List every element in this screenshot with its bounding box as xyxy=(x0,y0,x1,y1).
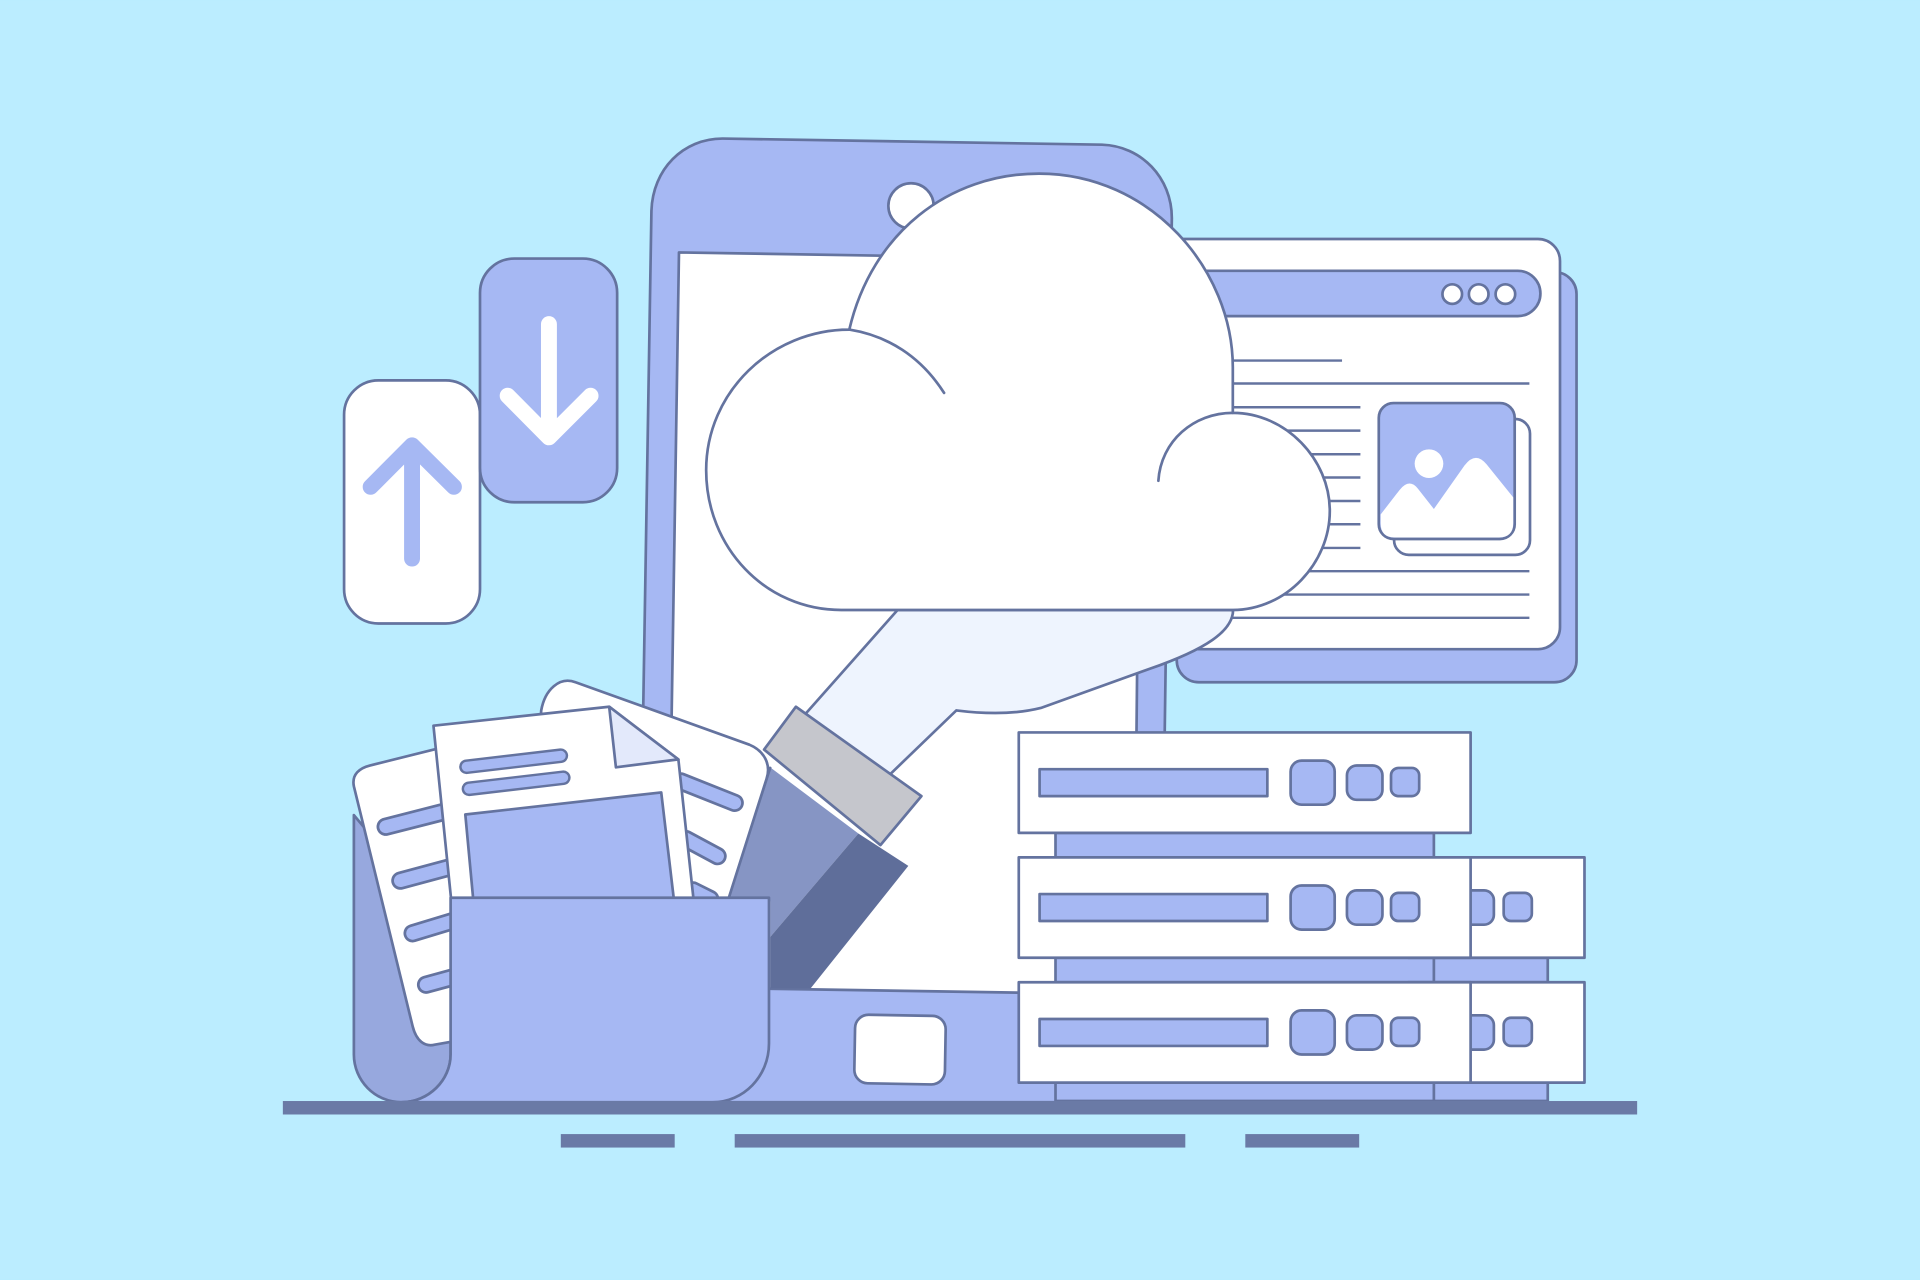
server back unit bottom xyxy=(1408,982,1584,1083)
ground dash left xyxy=(561,1134,675,1148)
document text lines xyxy=(467,756,563,789)
server unit middle xyxy=(1019,857,1471,958)
folder back xyxy=(354,815,451,1102)
ground line xyxy=(283,1101,1637,1114)
window header bar xyxy=(1176,271,1540,316)
document back right xyxy=(527,681,768,906)
document back left xyxy=(353,747,490,1045)
image mountains icon xyxy=(1381,458,1513,538)
document folded corner xyxy=(609,707,678,767)
browser window xyxy=(1151,239,1577,682)
server connector bands xyxy=(1056,833,1548,1101)
server unit bottom xyxy=(1019,982,1471,1083)
server back unit middle xyxy=(1408,857,1584,958)
image card back xyxy=(1394,419,1530,555)
window front panel xyxy=(1151,239,1560,649)
window back panel xyxy=(1177,272,1577,682)
flashlight body dark xyxy=(770,833,908,988)
tablet device xyxy=(637,139,1172,1102)
cloud inner curves xyxy=(849,330,1233,481)
flashlight head xyxy=(764,707,921,845)
light beam from flashlight to cloud xyxy=(802,610,1233,777)
document front xyxy=(433,707,694,906)
server stack xyxy=(1019,732,1584,1101)
cloud xyxy=(706,174,1330,610)
server unit top xyxy=(1019,732,1471,833)
folder with documents xyxy=(353,681,769,1102)
ground dash right xyxy=(1245,1134,1359,1148)
window control dots xyxy=(1442,284,1515,304)
down arrow xyxy=(508,324,591,437)
window text lines xyxy=(1224,361,1529,618)
tablet camera xyxy=(888,183,934,229)
document image block xyxy=(465,792,675,906)
image card front xyxy=(1379,403,1515,539)
upload arrow card xyxy=(344,380,480,623)
flashlight body left edge xyxy=(726,768,770,901)
up arrow xyxy=(371,445,454,559)
image sun icon xyxy=(1415,449,1443,478)
folder front xyxy=(402,898,769,1102)
flashlight xyxy=(726,707,921,988)
flashlight body light xyxy=(726,766,858,937)
download arrow card xyxy=(480,259,617,502)
ground dash center xyxy=(735,1134,1185,1148)
tablet home button xyxy=(854,1015,946,1085)
tablet screen xyxy=(667,252,1141,994)
